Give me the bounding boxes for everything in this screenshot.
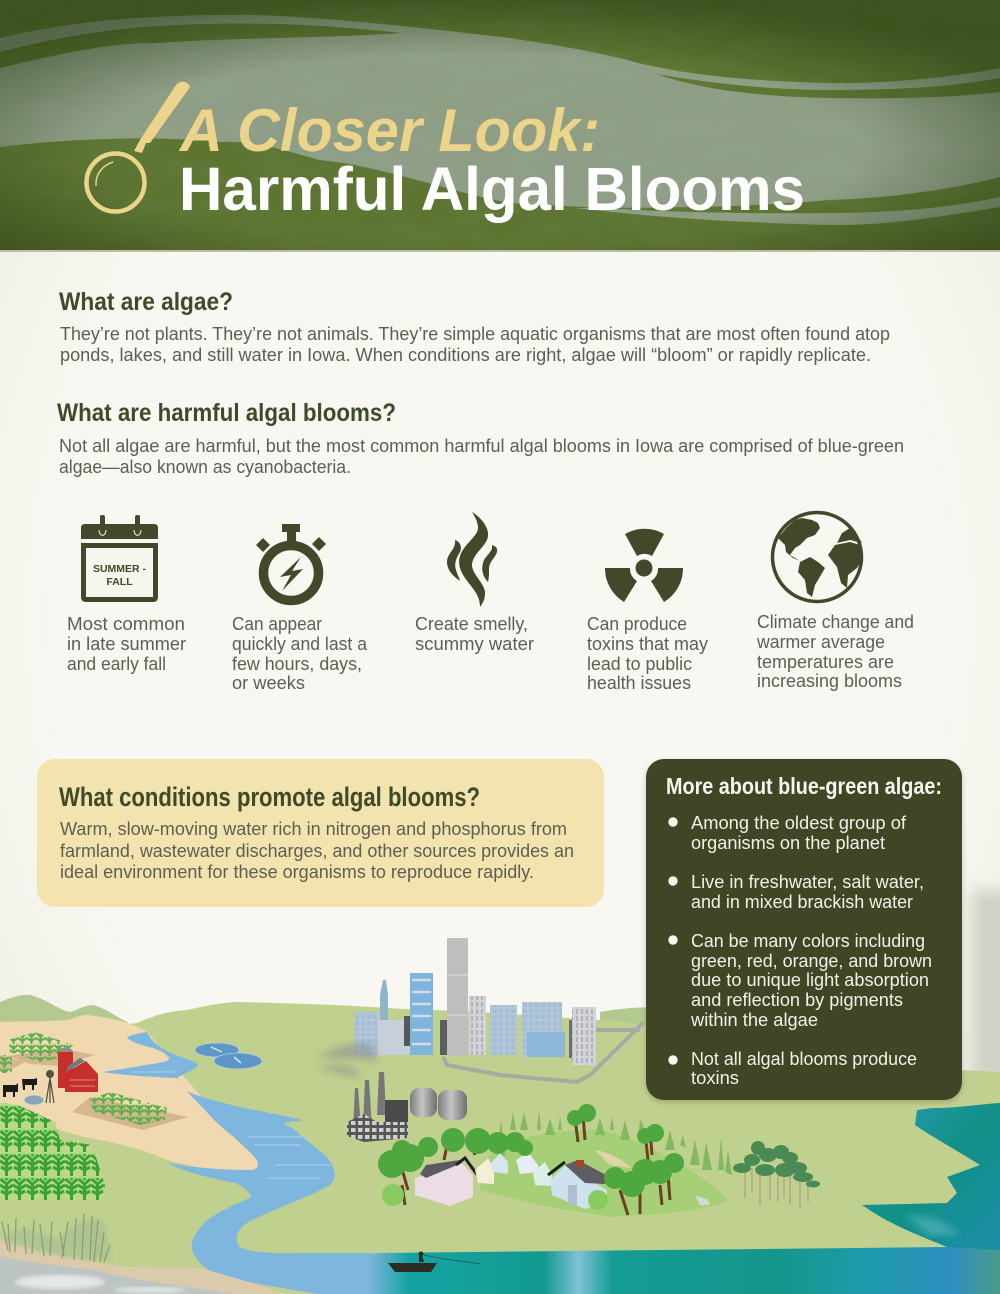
label: can appear: quickly and last a [232,634,368,654]
panel: what conditions promote algal blooms: Warm, slow-moving water rich in nitrogen and phosphorus from [60,818,567,839]
lake bottom [320,1240,1000,1294]
icon: calendar: SUMMER - [93,563,147,575]
section: what are algae: ponds, lakes, and still water in Iowa. When conditions are right, algae will “bloom” or rapidly replicate. [60,344,871,365]
label: climate change: temperatures are [757,652,894,672]
river ripples [130,1072,330,1178]
header banner [0,0,1000,252]
label: most common: in late summer [67,634,186,654]
label: smelly [415,614,534,654]
sand plain [0,1015,258,1171]
panel: more about blue-green algae [646,759,962,1100]
title [178,97,805,223]
icon: calendar [81,515,158,602]
bullet: colors: Can be many colors including [691,931,925,951]
river [103,1032,390,1294]
deciduous trees [378,1104,684,1215]
panel: what conditions promote algal blooms: ideal environment for these organisms to reproduce rapidly. [60,861,534,882]
panel: more about blue-green algae: More about blue-green algae: [666,773,942,799]
bullet: oldest group [668,813,907,853]
label: can appear: or weeks [232,673,305,693]
bullet: freshwater: Live in freshwater, salt water, [691,872,924,892]
lake highlight [905,1215,960,1236]
corn fields [0,1032,167,1200]
label: most common: and early fall [67,654,166,674]
far hills [0,995,700,1040]
field patches [0,1048,188,1130]
title: A Closer Look: [178,97,600,164]
panel: what conditions promote algal blooms: What conditions promote algal blooms? [59,782,480,812]
section: what are harmful algal blooms: Not all algae are harmful, but the most common harmful algal blooms in Iowa are comprised of blue-green [59,435,904,456]
label: can appear: few hours, days, [232,654,362,674]
label: most common: Most common [67,614,185,634]
section: what are algae [59,288,890,365]
section: what are harmful algal blooms: What are harmful algal blooms? [57,399,396,427]
title: Harmful Algal Blooms [179,155,805,223]
label: smelly: scummy water [415,634,534,654]
label: smelly: Create smelly, [415,614,528,634]
treatment ponds [195,1043,262,1069]
landscape illustration [0,938,1000,1294]
section: what are harmful algal blooms: algae—also known as cyanobacteria. [59,456,351,477]
label: toxins: toxins that may [587,634,708,654]
tall pines [733,1141,820,1208]
fishing boat [388,1252,481,1272]
panel: what conditions promote algal blooms [37,759,604,907]
label: toxins: Can produce [587,614,687,634]
label: can appear: Can appear [232,614,322,634]
label: toxins: lead to public [587,654,692,674]
icon: globe [772,512,863,602]
label: climate change: increasing blooms [757,671,902,691]
bullet: colors [668,931,932,1030]
bullet: colors: within the algae [690,1010,818,1030]
ground [0,1002,1000,1294]
bullet: colors: due to unique light absorption [691,970,929,990]
foam water [0,1256,235,1294]
icon: magnifying glass [86,82,190,211]
icon: smell waves [447,512,497,607]
bullet: freshwater [668,872,924,912]
bullet: colors: green, red, orange, and brown [691,951,932,971]
marsh grass [0,1214,112,1262]
city [355,938,643,1082]
bullet: oldest group: organisms on the planet [691,833,885,853]
label: climate change: Climate change and [757,612,914,632]
pine row [497,1110,732,1175]
panel: what conditions promote algal blooms: farmland, wastewater discharges, and other sources provides an [60,840,574,861]
icon: calendar: FALL [106,576,133,588]
bullet: toxins: Not all algal blooms produce [691,1049,917,1069]
label: most common [67,614,186,674]
bullet: colors: and reflection by pigments [691,990,903,1010]
section: what are algae: They’re not plants. They’re not animals. They’re simple aquatic organisms that are most often found atop [60,323,890,344]
beach [0,1238,287,1294]
section: what are algae: What are algae? [59,288,233,316]
factory [347,1072,467,1142]
bullet: toxins [668,1049,917,1088]
smoke [318,1043,378,1078]
label: climate change [756,612,914,691]
green neighbourhood lawn [480,1130,728,1217]
label: climate change: warmer average [756,632,885,652]
farm [3,1048,98,1105]
lake right [862,1103,1000,1250]
houses [415,1152,607,1209]
bullet: freshwater: and in mixed brackish water [691,892,913,912]
label: toxins [587,614,708,693]
section: what are harmful algal blooms [57,399,904,477]
icon: stopwatch [256,524,326,600]
icon: radiation [605,529,683,602]
bullet: toxins: toxins [691,1068,739,1088]
label: can appear [232,614,368,693]
bullet: oldest group: Among the oldest group of [691,813,907,833]
label: toxins: health issues [587,673,691,693]
